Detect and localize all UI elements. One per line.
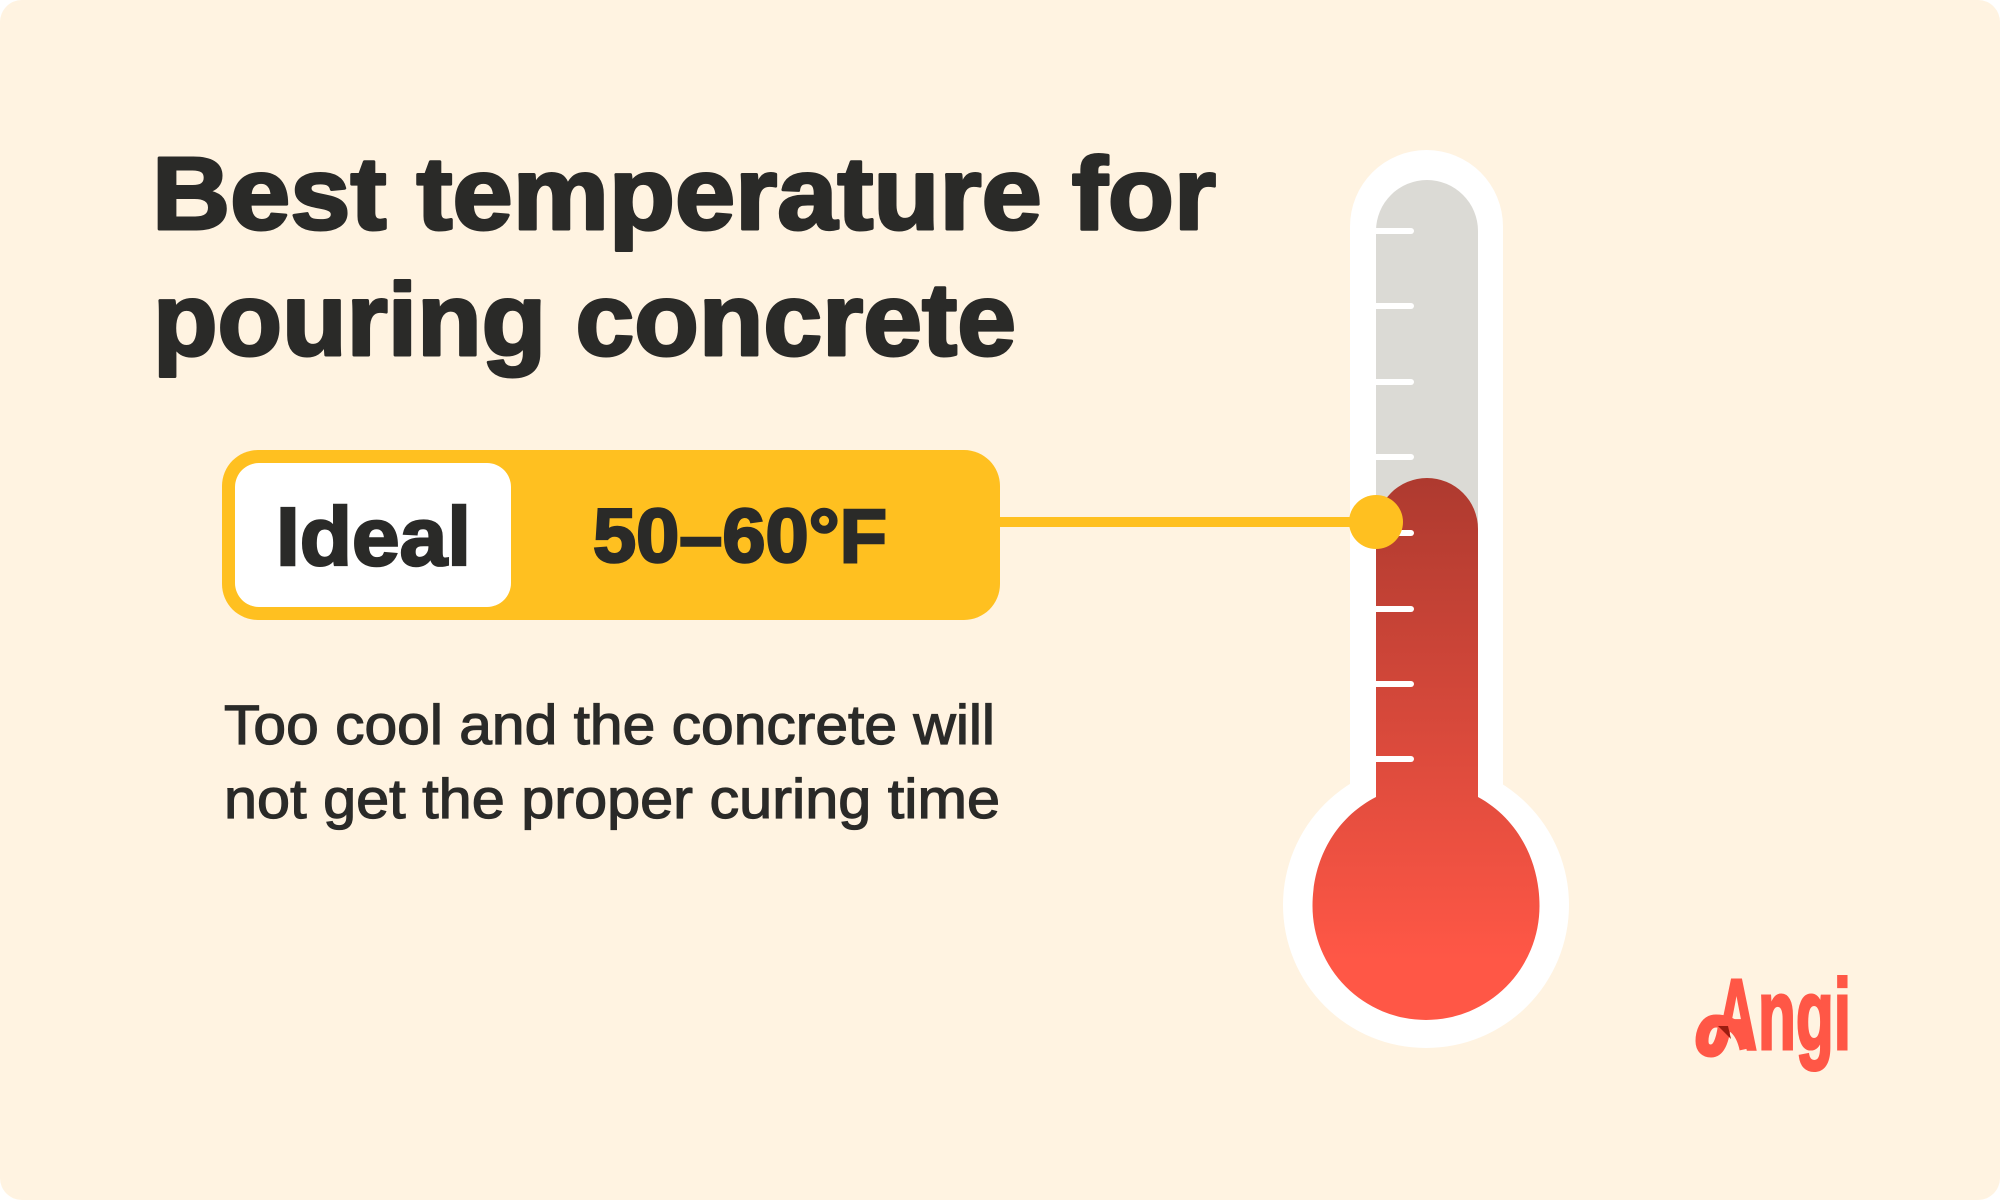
- logo wordmark: A: [1716, 959, 1757, 1071]
- temperature range: 50–60°F: [593, 494, 887, 579]
- connector line: [995, 517, 1355, 527]
- logo swoosh shadow: [1718, 1026, 1731, 1039]
- logo leg mask: [1706, 1027, 1741, 1052]
- title: pouring concrete: [153, 262, 1016, 377]
- scale ticks: [1370, 228, 1414, 762]
- thermometer white casing: [1283, 150, 1569, 1048]
- body text: [224, 693, 1000, 830]
- thermometer: [1283, 150, 1569, 1048]
- thermometer empty tube: [1376, 180, 1478, 790]
- ideal label: Ideal: [276, 490, 471, 583]
- body text: not get the proper curing time: [224, 767, 1000, 830]
- title: Best temperature for: [152, 136, 1216, 251]
- logo swoosh: [1702, 1018, 1746, 1051]
- Angi logo: [1702, 959, 1851, 1071]
- callout background: [222, 450, 1000, 620]
- logo wordmark: ngi: [1758, 959, 1851, 1071]
- title: [152, 136, 1216, 377]
- mercury fill: [1312, 478, 1540, 1020]
- callout: ideal temperature: [222, 450, 1000, 620]
- body text: Too cool and the concrete will: [224, 693, 995, 756]
- marker dot: [1349, 495, 1403, 549]
- ideal label chip: [235, 463, 511, 607]
